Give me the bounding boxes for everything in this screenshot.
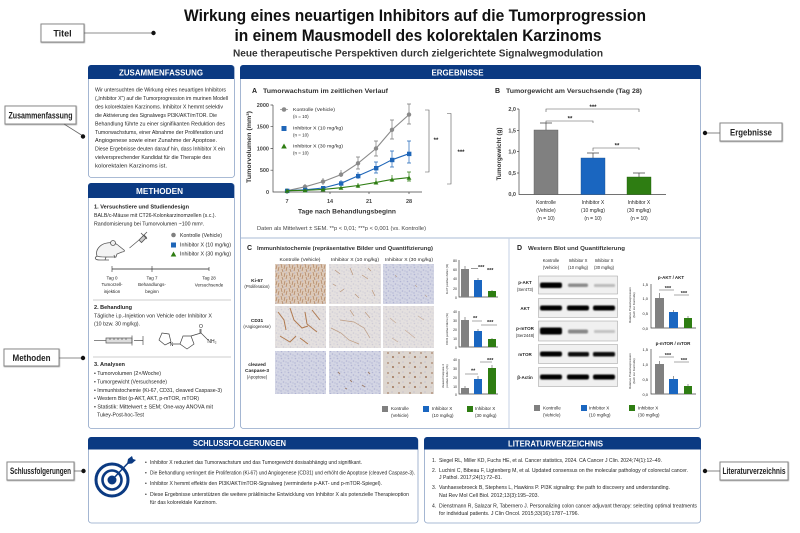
legend C: (10 mg/kg) xyxy=(432,413,454,418)
panel: Methoden xyxy=(88,183,234,428)
chart A: tumor growth: 2000 xyxy=(257,103,269,109)
section 3 list: • Tumorvolumen (2×/Woche) xyxy=(94,371,161,377)
reference list: for individual patients. J Clin Oncol. 2015;33(16):1787–1796. xyxy=(439,511,579,517)
significance brackets A xyxy=(425,110,465,184)
conclusions list: • xyxy=(145,481,147,487)
quant: p-AKT / AKT xyxy=(628,275,696,331)
timeline: Behandlungs- xyxy=(138,282,166,287)
chart B: tumor weight: Inhibitor X xyxy=(628,200,651,206)
legend A: (n = 10) xyxy=(293,132,309,138)
chart A: tumor growth: A xyxy=(252,88,257,95)
panel D: western blot: mTOR xyxy=(518,352,532,357)
section 1 text: BALB/c-Mäuse mit CT26-Kolonkarzinomzellen (s.c.). xyxy=(94,213,216,219)
legend C xyxy=(382,406,497,418)
panel: Literaturverzeichnis: LITERATURVERZEICHNIS xyxy=(508,440,604,448)
quant: p-AKT / AKT: 0,0 xyxy=(642,326,649,331)
panel D: western blot: (Ser473) xyxy=(517,287,534,292)
timeline: Versuchsende xyxy=(195,282,224,288)
chart B: tumor weight: 0,5 xyxy=(508,171,516,177)
panel C: immunohistochemistry xyxy=(243,245,498,418)
section 1 text: Randomisierung bei Tumorvolumen ~100 mm³. xyxy=(94,222,204,228)
reference list: Siegel RL, Miller KD, Fuchs HE, et al. Cancer statistics, 2024. CA Cancer J Clin. 2024;74(1):12–49. xyxy=(439,458,662,464)
callout: Zusammenfassung: Zusammenfassung xyxy=(8,110,72,120)
mini bars: CD31: *** xyxy=(487,320,494,326)
chart A: tumor growth: 7 xyxy=(285,199,289,205)
icon: injection syringe xyxy=(130,232,147,248)
text block: abstract xyxy=(95,88,228,170)
mini bars: Caspase-3: 30 xyxy=(453,367,457,371)
section 2 text: 2. Behandlung xyxy=(94,305,132,311)
text block: abstract: („Inhibitor X“) auf die Tumorprogression im murinen Modell xyxy=(95,96,228,102)
icon: molecule xyxy=(159,324,217,349)
section 3 list xyxy=(94,362,222,418)
quant: p-mTOR / mTOR: p-mTOR / mTOR xyxy=(656,341,691,346)
series: Kontrolle xyxy=(285,104,411,193)
callout: Methoden xyxy=(4,349,85,366)
chart B: tumor weight: *** xyxy=(589,105,597,111)
quant: p-AKT / AKT: p-AKT / AKT xyxy=(658,275,684,280)
reference list: 4. xyxy=(432,504,436,510)
chart B: tumor weight: Tumorgewicht (g) xyxy=(497,128,503,180)
panel: Literaturverzeichnis xyxy=(424,437,701,523)
panel D: western blot: (30 mg/kg) xyxy=(594,265,615,270)
timeline: Tumorzell- xyxy=(101,282,123,287)
panel D: western blot: Inhibitor X xyxy=(595,258,614,263)
reference list: Nat Rev Mol Cell Biol. 2012;13(3):195–203. xyxy=(439,493,539,499)
legend: groups: Inhibitor X (30 mg/kg) xyxy=(180,252,231,258)
chart B: tumor weight: (n = 10) xyxy=(584,216,602,222)
callout: Schlussfolgerungen xyxy=(7,462,86,480)
text block: abstract: des kolorektalen Karzinoms. Inhibitor X hemmt selektiv xyxy=(95,104,224,110)
reference list: 3. xyxy=(432,485,436,491)
icon: syringe xyxy=(94,336,143,346)
legend D: (Vehicle) xyxy=(543,412,561,418)
conclusions list: • xyxy=(145,460,147,466)
panel: Schlussfolgerungen: SCHLUSSFOLGERUNGEN xyxy=(193,439,286,448)
quant: p-AKT / AKT: *** xyxy=(665,286,672,292)
section 3 list: • Western Blot (p-AKT, AKT, p-mTOR, mTOR) xyxy=(94,396,199,402)
chart B: tumor weight: (n = 10) xyxy=(537,216,555,222)
mini bars: Ki-67: 20 xyxy=(453,287,457,291)
legend D xyxy=(534,405,660,418)
panel C: immunohistochemistry: (Angiogenese) xyxy=(243,324,271,329)
section 3 list: • Immunhistochemie (Ki-67, CD31, cleaved Caspase-3) xyxy=(94,388,222,394)
chart B: tumor weight: ** xyxy=(615,144,620,150)
quant: p-AKT / AKT: 1,5 xyxy=(642,282,649,287)
panel C: immunohistochemistry: Inhibitor X (10 mg/kg) xyxy=(331,257,380,262)
subtitle: Neue therapeutische Perspektiven durch zielgerichtete Signalwegmodulation xyxy=(233,48,603,60)
quant: p-AKT / AKT: Relative Proteinexpression xyxy=(628,287,632,323)
callout: Titel: Titel xyxy=(53,28,72,38)
chart B: tumor weight: Tumorgewicht am Versuchsende (Tag 28) xyxy=(506,89,642,95)
callout: Methoden: Methoden xyxy=(12,353,50,363)
section 1 text xyxy=(94,204,216,228)
mini bars: Ki-67: 40 xyxy=(453,277,457,281)
mini bars: Caspase-3: 0 xyxy=(455,393,457,397)
icon: molecule: N xyxy=(170,342,174,348)
mini bars: Ki-67: 80 xyxy=(453,259,457,263)
blot strips xyxy=(538,276,618,386)
callout: Ergebnisse: Ergebnisse xyxy=(730,128,772,138)
panel: Zusammenfassung: ZUSAMMENFASSUNG xyxy=(119,68,203,78)
panel D: western blot: Western Blot und Quantifizierung xyxy=(528,246,626,252)
mini bars: Ki-67: Ki-67 positive Zellen (%) xyxy=(445,264,449,294)
text block: abstract: kolorektalen Karzinoms ist. xyxy=(95,164,167,170)
panel D: western blot: β-Actin xyxy=(517,375,533,380)
legend A: Inhibitor X (10 mg/kg) xyxy=(293,126,344,130)
section 3 list: Tukey-Post-hoc-Test xyxy=(97,412,145,418)
timeline: beginn xyxy=(145,289,159,294)
panel C: immunohistochemistry: Inhibitor X (30 mg/kg) xyxy=(385,257,434,262)
text block: abstract: Behandlung führte zu einer signifikanten Reduktion des xyxy=(95,122,226,128)
quant: p-mTOR / mTOR: 0,5 xyxy=(642,377,649,382)
callout: Schlussfolgerungen: Schlussfolgerungen xyxy=(10,466,71,476)
legend C: (30 mg/kg) xyxy=(475,413,497,418)
section 2 text: Tägliche i.p.-Injektion von Vehicle oder Inhibitor X xyxy=(94,314,213,320)
mini bars: Ki-67 xyxy=(445,259,498,300)
conclusions list: • xyxy=(145,470,147,476)
reference list: J Pathol. 2017;24(1):72–81. xyxy=(439,475,502,481)
quant: p-mTOR / mTOR: 0,0 xyxy=(642,392,649,397)
legend D: Inhibitor X xyxy=(638,406,658,410)
panel D: western blot: Kontrolle xyxy=(543,258,560,263)
icon: target xyxy=(96,456,136,496)
panel C: immunohistochemistry: cleaved xyxy=(248,362,266,368)
chart A: tumor growth: 28 xyxy=(406,199,412,205)
mini bars: Caspase-3: 10 xyxy=(453,385,457,389)
quant: p-mTOR / mTOR xyxy=(628,341,696,397)
callout: Titel xyxy=(41,24,156,42)
section 1 text: 1. Versuchstiere und Studiendesign xyxy=(94,204,190,210)
panel C: immunohistochemistry: (Proliferation) xyxy=(244,284,270,289)
chart A: tumor growth: Tumorvolumen (mm³) xyxy=(246,111,253,183)
panel C: immunohistochemistry: Caspase-3 xyxy=(245,368,269,374)
chart B: tumor weight: Kontrolle xyxy=(536,200,556,206)
icon: molecule: NH₂ xyxy=(207,339,217,345)
legend: groups: Kontrolle (Vehicle) xyxy=(180,233,222,239)
quant: p-AKT / AKT: 1,0 xyxy=(642,296,649,301)
callout: Ergebnisse xyxy=(703,123,782,141)
reference list: Dienstmann R, Salazar R, Tabernero J. Personalizing colon cancer adjuvant therapy: selecting optimal treatments xyxy=(439,504,698,510)
legend D: Kontrolle xyxy=(543,406,561,410)
section 3 list: • Statistik: Mittelwert ± SEM; One-way ANOVA mit xyxy=(94,404,214,410)
icon: mouse xyxy=(95,240,124,260)
section 2 text xyxy=(94,305,213,328)
panel C: immunohistochemistry: (Apoptose) xyxy=(247,374,268,380)
quant: p-AKT / AKT: *** xyxy=(681,291,688,297)
text block: abstract: Tumorwachstums, einer Abnahme der Proliferation und xyxy=(95,130,223,136)
title: in einem Mausmodell des kolorektalen Karzinoms xyxy=(234,26,602,45)
panel D: western blot: D xyxy=(517,245,522,252)
chart B: tumor weight: B xyxy=(495,88,500,95)
chart A: tumor growth: 14 xyxy=(327,199,334,205)
legend A: Inhibitor X (30 mg/kg) xyxy=(293,144,344,148)
title: Wirkung eines neuartigen Inhibitors auf die Tumorprogression xyxy=(184,6,646,25)
chart B: tumor weight: (n = 10) xyxy=(630,216,648,222)
mini bars: CD31: 0 xyxy=(455,346,457,350)
conclusions list: Inhibitor X hemmt effektiv den PI3K/AKT/mTOR-Signalweg (verminderte p-AKT- und p-mTOR-Spiegel). xyxy=(150,481,382,487)
chart B: tumor weight: (Vehicle) xyxy=(536,208,556,214)
panel C: immunohistochemistry: Immunhistochemie (repräsentative Bilder und Quantifizierung) xyxy=(257,246,433,252)
panel D: western blot: p-AKT xyxy=(518,280,532,285)
chart A: tumor growth: Tage nach Behandlungsbeginn xyxy=(298,208,396,216)
conclusions list: für das kolorektale Karzinom. xyxy=(150,500,217,506)
quant: p-mTOR / mTOR: Relative Proteinexpression xyxy=(628,353,632,389)
mini bars: CD31: ** xyxy=(473,316,478,322)
mini bars: Ki-67: 60 xyxy=(453,268,457,272)
significance brackets A: *** xyxy=(457,150,465,156)
section 3 list: • Tumorgewicht (Versuchsende) xyxy=(94,380,167,386)
mini bars: CD31: 30 xyxy=(453,319,457,323)
chart B: tumor weight: 1,5 xyxy=(508,128,516,134)
mini bars: Caspase-3 xyxy=(441,358,498,397)
text block: abstract: Diese Ergebnisse deuten darauf hin, dass Inhibitor X ein xyxy=(95,146,225,152)
text block: abstract: Angiogenese sowie einer Zunahme der Apoptose. xyxy=(95,138,217,144)
timeline: injektion xyxy=(104,289,121,294)
conclusions list: • xyxy=(145,492,147,498)
icon: molecule: O xyxy=(199,324,203,330)
legend A: (n = 10) xyxy=(293,114,309,119)
mini bars: Caspase-3: positive Zellen (%) xyxy=(445,364,449,388)
mini bars: Ki-67: 0 xyxy=(455,296,457,300)
legend A xyxy=(280,107,344,156)
mini bars: Caspase-3: *** xyxy=(487,358,494,364)
legend C: Kontrolle xyxy=(391,406,409,411)
reference list: Luchini C, Bibeau F, Ligtenberg M, et al. Updated consensus on the molecular pathology of colorectal cancer. xyxy=(439,468,688,474)
timeline: Tag 28 xyxy=(202,276,216,280)
mini bars: CD31: 20 xyxy=(453,328,457,332)
panel D: western blot: AKT xyxy=(520,306,530,311)
mini bars: CD31: 40 xyxy=(453,310,457,314)
conclusions list: Die Behandlung verringert die Proliferation (Ki-67) und Angiogenese (CD31) und erhöht die Apoptose (cleaved Caspase-3). xyxy=(150,470,415,476)
conclusions list: Inhibitor X reduziert das Tumorwachstum und das Tumorgewicht dosisabhängig und signifikant. xyxy=(150,460,362,466)
chart A: tumor growth: 0 xyxy=(266,190,269,196)
quant: p-mTOR / mTOR: (fach zur Kontrolle) xyxy=(632,358,636,384)
mini bars: Ki-67: *** xyxy=(478,265,485,271)
section 2 text: (10 bzw. 30 mg/kg). xyxy=(94,322,140,328)
significance brackets A: ** xyxy=(434,138,439,144)
mini bars: CD31 xyxy=(445,310,498,350)
legend A: Kontrolle (Vehicle) xyxy=(293,107,336,112)
conclusions list xyxy=(145,460,415,506)
chart B: tumor weight xyxy=(495,88,666,222)
panel C: immunohistochemistry: Kontrolle (Vehicle) xyxy=(280,257,321,262)
mini bars: CD31: 10 xyxy=(453,337,457,341)
panel C: immunohistochemistry: CD31 xyxy=(251,318,263,324)
legend: groups: Inhibitor X (10 mg/kg) xyxy=(180,242,231,248)
chart B: tumor weight: ** xyxy=(568,116,573,122)
reference list xyxy=(432,458,698,517)
text block: abstract: vielversprechender Kandidat für die Therapie des xyxy=(95,155,212,161)
quant: p-mTOR / mTOR: 1,5 xyxy=(642,347,649,352)
panel D: western blot xyxy=(516,245,696,418)
mini bars: CD31: CD31 positive Fläche (%) xyxy=(445,313,449,345)
panel: Ergebnisse: ERGEBNISSE xyxy=(432,68,484,78)
reference list: 2. xyxy=(432,468,436,474)
reference list: 1. xyxy=(432,458,436,464)
timeline: Tag 0 xyxy=(106,276,118,280)
reference list: Vanhaesebroeck B, Stephens L, Hawkins P. PI3K signaling: the path to discovery and understanding. xyxy=(439,485,670,491)
panel D: western blot: (Ser2448) xyxy=(516,333,535,338)
panel: Methoden: METHODEN xyxy=(136,187,183,196)
mini bars: Caspase-3: ** xyxy=(471,368,476,374)
chart A: tumor growth: 1500 xyxy=(257,124,269,130)
quant: p-mTOR / mTOR: *** xyxy=(681,358,688,364)
chart B: tumor weight: (30 mg/kg) xyxy=(627,208,651,214)
legend: groups xyxy=(171,233,231,258)
chart B: tumor weight: (10 mg/kg) xyxy=(581,208,605,214)
legend A: (n = 10) xyxy=(293,150,309,156)
text block: abstract: die Aktivierung des Signalwegs PI3K/AKT/mTOR. Die xyxy=(95,113,217,119)
callout: Literaturverzeichnis xyxy=(703,462,788,480)
legend D: (30 mg/kg) xyxy=(638,412,660,418)
mini bars: Ki-67: *** xyxy=(487,268,494,274)
legend D: (10 mg/kg) xyxy=(589,412,611,418)
timeline xyxy=(101,266,224,294)
quant: p-AKT / AKT: (fach zur Kontrolle) xyxy=(632,292,636,318)
panel D: western blot: Inhibitor X xyxy=(569,258,588,263)
chart B: tumor weight: 2,0 xyxy=(508,107,516,113)
mini bars: Caspase-3: cleaved Caspase-3 xyxy=(441,364,445,388)
chart B: tumor weight: 0,0 xyxy=(508,192,516,198)
panel D: western blot: (Vehicle) xyxy=(543,265,560,270)
callout: Zusammenfassung xyxy=(5,106,85,139)
panel: Schlussfolgerungen xyxy=(88,437,418,523)
chart A: tumor growth xyxy=(246,88,465,232)
chart B: tumor weight: 1,0 xyxy=(508,150,516,156)
series: Inhibitor X 30 mg/kg xyxy=(285,172,411,193)
legend C: Inhibitor X xyxy=(432,406,452,411)
chart A: tumor growth: Tumorwachstum im zeitlichen Verlauf xyxy=(263,89,389,95)
mini bars: Caspase-3: 20 xyxy=(453,376,457,380)
panel D: western blot: p-mTOR xyxy=(516,326,535,331)
panel D: western blot: (10 mg/kg) xyxy=(568,265,589,270)
legend D: Inhibitor X xyxy=(589,406,609,410)
panel C: immunohistochemistry: C xyxy=(247,245,252,252)
quant: p-mTOR / mTOR: 1,0 xyxy=(642,362,649,367)
quant: p-AKT / AKT: 0,5 xyxy=(642,311,649,316)
legend C: Inhibitor X xyxy=(475,406,495,411)
chart A: tumor growth: 1000 xyxy=(257,146,269,152)
timeline: Tag 7 xyxy=(146,276,158,280)
chart A: tumor growth: 21 xyxy=(366,199,372,205)
panel: Ergebnisse xyxy=(240,65,701,428)
panel: Zusammenfassung xyxy=(88,65,234,178)
title xyxy=(184,6,646,45)
footnote: Daten als Mittelwert ± SEM. **p < 0,01; ***p < 0,001 (vs. Kontrolle) xyxy=(257,226,426,232)
legend C: (Vehicle) xyxy=(391,413,409,418)
conclusions list: Diese Ergebnisse unterstützen die weitere präklinische Entwicklung von Inhibitor X als potenzielle Therapieoption xyxy=(150,492,409,498)
mini bars: Caspase-3: 40 xyxy=(453,358,457,362)
panel C: immunohistochemistry: Ki-67 xyxy=(251,278,263,284)
section 3 list: 3. Analysen xyxy=(94,362,126,368)
chart A: tumor growth: 500 xyxy=(260,168,269,174)
quant: p-mTOR / mTOR: *** xyxy=(665,353,672,359)
text block: abstract: Wir untersuchten die Wirkung eines neuartigen Inhibitors xyxy=(95,88,227,94)
series: Inhibitor X 10 mg/kg xyxy=(285,141,411,193)
chart B: tumor weight: Inhibitor X xyxy=(582,200,605,206)
histology image grid xyxy=(275,264,434,394)
